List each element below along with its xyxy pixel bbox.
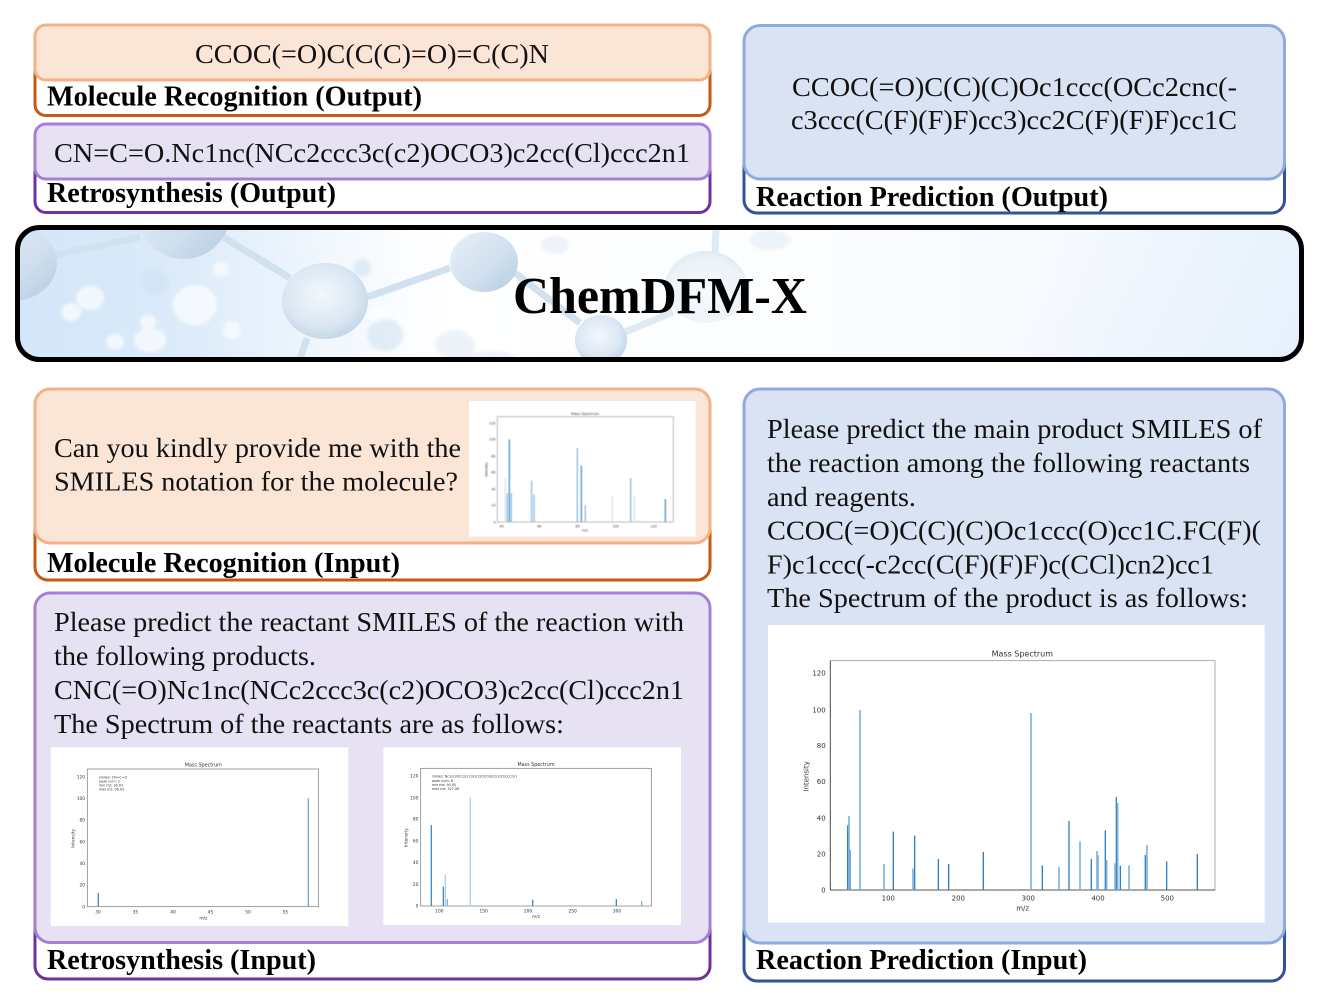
chart: mass spectrum (molecule recognition) [469,401,696,537]
chart: mass spectrum product: m/z [1016,904,1029,912]
chart: mass spectrum reactant 1: smiles: CN=C=O [99,775,127,779]
chart: mass spectrum reactant 1: 120 [77,774,85,780]
chart: mass spectrum product: 400 [1091,894,1105,902]
chart: mass spectrum reactant 1: 0 [82,904,85,910]
chart: mass spectrum reactant 2: 100 [435,908,444,914]
text: retrosynthesis prompt: CNC(=O)Nc1nc(NCc2ccc3c(c2)OCO3)c2cc(Cl)ccc2n1 [54,675,684,705]
chart: mass spectrum product [768,625,1265,923]
heading: reaction prediction input: Reaction Prediction (Input) [756,944,1087,976]
text: retrosynthesis SMILES output: CN=C=O.Nc1nc(NCc2ccc3c(c2)OCO3)c2cc(Cl)ccc2n1 [54,138,690,168]
chart: mass spectrum reactant 2: 40 [413,860,419,866]
chart: mass spectrum reactant 1: 100 [77,796,85,802]
chart: mass spectrum product: 60 [817,778,826,786]
text: reaction prediction SMILES output: CCOC(=O)C(C)(C)Oc1ccc(OCc2cnc(- [792,72,1237,102]
chart: mass spectrum reactant 2: Intensity [404,828,410,847]
chart: mass spectrum (molecule recognition): 0 [494,520,496,524]
chart: mass spectrum reactant 2: peak num: 8 [432,779,453,783]
chart: mass spectrum product: 120 [812,670,826,678]
chart: mass spectrum (molecule recognition): 40 [491,487,496,491]
chart: mass spectrum product: 100 [882,894,895,902]
panel: retrosynthesis output [35,124,710,212]
chart: mass spectrum (molecule recognition): 40 [500,524,504,528]
chart: mass spectrum reactant 1: 40 [170,910,176,916]
chart: mass spectrum product: 40 [817,814,826,822]
text: reaction prediction prompt: and reagents. [767,482,916,512]
chart: mass spectrum (molecule recognition): 120 [489,421,496,425]
chart: mass spectrum reactant 2: min mz: 90.05 [432,783,456,787]
text: reaction prediction SMILES output [791,72,1237,135]
chart: mass spectrum reactant 1: 55 [283,910,288,916]
chart: mass spectrum product: 0 [821,886,826,894]
chart: mass spectrum reactant 2: 20 [413,882,419,888]
chart: mass spectrum (molecule recognition): m/z [582,529,588,533]
chart: mass spectrum (molecule recognition): 60 [491,471,496,475]
chart: mass spectrum product: Intensity [802,761,810,792]
chart: mass spectrum reactant 1: 40 [79,861,85,867]
text: reaction prediction prompt: the reaction among the following reactants [767,448,1250,478]
chart: mass spectrum reactant 1: 35 [133,910,138,916]
text: molecule recognition prompt: Can you kindly provide me with the [54,433,461,463]
panel: retrosynthesis input [35,593,710,979]
text: molecule recognition SMILES output: CCOC(=O)C(C(C)=O)=C(C)N [195,39,549,69]
text: reaction prediction prompt: The Spectrum of the product is as follows: [767,583,1248,613]
chart: mass spectrum product: 20 [817,851,826,859]
chart: mass spectrum reactant 2: 150 [480,908,488,914]
chart: mass spectrum reactant 2: m/z [532,914,541,920]
panel: reaction prediction output [744,26,1284,213]
text: reaction prediction prompt: CCOC(=O)C(C)(C)Oc1ccc(O)cc1C.FC(F)( [767,516,1261,546]
chart: mass spectrum product: Mass Spectrum [992,649,1053,658]
chart: mass spectrum (molecule recognition): 80 [491,454,496,458]
chart: mass spectrum reactant 1: 60 [79,839,85,845]
text: retrosynthesis prompt [54,607,685,739]
chart: mass spectrum reactant 1: max mz: 58.03 [99,788,124,792]
chart: mass spectrum reactant 1: Intensity [71,828,77,848]
chart: mass spectrum reactant 2: 80 [413,817,419,823]
text: reaction prediction SMILES output: c3ccc(C(F)(F)F)cc3)cc2C(F)(F)F)cc1C [791,105,1237,135]
chart: mass spectrum reactant 1: Mass Spectrum [185,763,222,769]
text: molecule recognition prompt [54,433,461,496]
chart: mass spectrum reactant 2: 250 [569,908,577,914]
chart: mass spectrum (molecule recognition): 20 [491,504,496,508]
heading: molecule recognition input: Molecule Recognition (Input) [47,547,400,579]
panel: reaction prediction input [744,389,1284,981]
panel: molecule recognition output [35,25,710,116]
chart: mass spectrum reactant 1: 80 [79,818,85,824]
chart: mass spectrum (molecule recognition): 80 [576,524,580,528]
chart: mass spectrum reactant 1: min mz: 30.03 [99,784,123,788]
chart: mass spectrum product: 200 [952,894,965,902]
chart: mass spectrum reactant 2: 200 [524,908,532,914]
chart: mass spectrum reactant 1: 20 [79,883,85,889]
chart: mass spectrum reactant 2: smiles: Nc1nc(NCc2ccc3c(c2)OCO3)c2cc(Cl)ccc2n1 [432,775,517,779]
chart: mass spectrum reactant 1: 45 [208,910,213,916]
text: molecule recognition prompt: SMILES notation for the molecule? [54,466,458,496]
chart: mass spectrum reactant 2: 100 [410,795,419,801]
chart: mass spectrum product: 300 [1022,894,1035,902]
chart: mass spectrum reactant 2: 60 [413,838,419,844]
text: retrosynthesis prompt: Please predict the reactant SMILES of the reaction with [54,607,685,637]
chart: mass spectrum reactant 2: 300 [613,908,621,914]
title: ChemDFM-X [513,268,807,325]
chart: mass spectrum reactant 1: 50 [245,910,251,916]
text: retrosynthesis prompt: the following products. [54,641,316,671]
chart: mass spectrum reactant 1 [51,747,348,926]
chart: mass spectrum (molecule recognition): 100 [612,524,619,528]
chart: mass spectrum reactant 1: peak num: 2 [99,779,120,783]
heading: molecule recognition output: Molecule Recognition (Output) [47,80,422,112]
chart: mass spectrum product: 500 [1161,894,1174,902]
chart: mass spectrum (molecule recognition): Intensity [485,462,489,477]
chart: mass spectrum (molecule recognition): 100 [489,438,496,442]
banner: ChemDFM-X [15,225,1304,362]
chart: mass spectrum (molecule recognition): 120 [650,524,657,528]
panel: molecule recognition input [35,389,710,580]
heading: retrosynthesis input: Retrosynthesis (Input) [47,944,316,976]
text: reaction prediction prompt: Please predict the main product SMILES of [767,414,1262,444]
text: reaction prediction prompt [767,414,1262,613]
heading: retrosynthesis output: Retrosynthesis (Output) [47,177,336,209]
chart: mass spectrum reactant 2: Mass Spectrum [517,762,555,768]
text: reaction prediction prompt: F)c1ccc(-c2cc(C(F)(F)F)c(CCl)cn2)cc1 [767,550,1214,580]
chart: mass spectrum reactant 2 [383,747,681,925]
heading: reaction prediction output: Reaction Prediction (Output) [756,181,1108,213]
chart: mass spectrum reactant 2: 120 [410,773,419,779]
text: retrosynthesis prompt: The Spectrum of the reactants are as follows: [54,709,564,739]
chart: mass spectrum (molecule recognition): 60 [537,524,541,528]
chart: mass spectrum reactant 1: m/z [199,915,208,921]
chart: mass spectrum product: 80 [817,742,826,750]
chart: mass spectrum reactant 2: 0 [416,904,419,910]
chart: mass spectrum (molecule recognition): Mass Spectrum [571,412,599,416]
chart: mass spectrum reactant 1: 30 [95,910,101,916]
chart: mass spectrum product: 100 [812,706,826,714]
molecule background illustration [20,230,1299,357]
chart: mass spectrum reactant 2: max mz: 327.06 [432,787,459,791]
